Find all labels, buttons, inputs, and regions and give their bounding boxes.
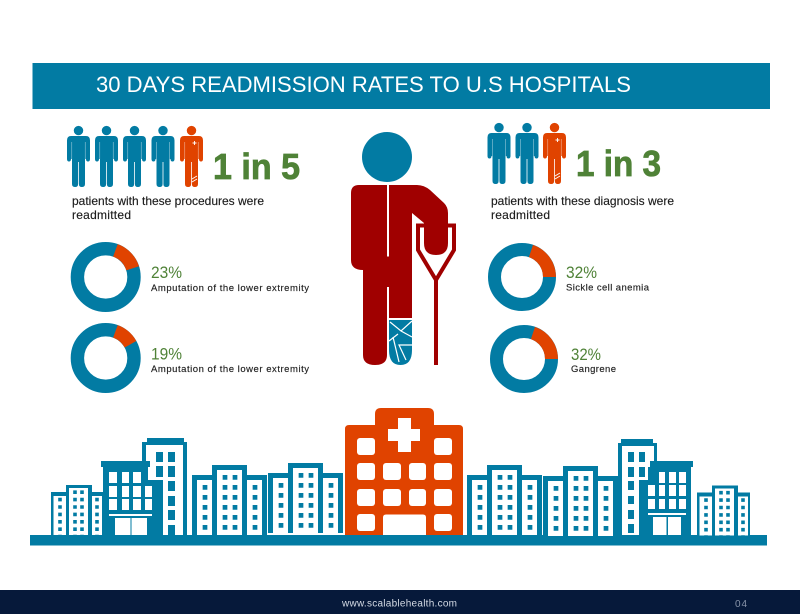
page number: 04 (735, 599, 747, 610)
description: diagnosis: patients with these diagnosis were (491, 194, 674, 208)
label: 19%: 19% (151, 346, 182, 364)
footer url: www.scalablehealth.com (341, 598, 457, 610)
statistic: 1 in 3: 1 in 3 (576, 143, 661, 184)
hospital (345, 408, 463, 535)
cityscape (30, 408, 767, 546)
panel: procedures (67, 126, 309, 386)
donut: gangrene (496, 327, 558, 386)
left buildings (51, 438, 343, 535)
label: gangrene (571, 346, 616, 375)
label: 19% (151, 346, 309, 375)
label: 23%: Amputation of the lower extremity (151, 283, 309, 294)
icon row: 1 in 3 people (488, 123, 566, 184)
label: 19%: Amputation of the lower extremity (151, 364, 309, 375)
description: diagnosis: readmitted (491, 208, 550, 222)
icon row: 1 in 5 people (67, 126, 203, 187)
donut: 23% (77, 244, 139, 305)
footer (0, 590, 800, 614)
description: procedures: patients with these procedures were (72, 194, 264, 208)
title banner (32, 63, 770, 109)
title: 30 DAYS READMISSION RATES TO U.S HOSPITALS (96, 72, 631, 97)
donut: 19% (77, 325, 136, 386)
label: 23%: 23% (151, 264, 182, 282)
right buildings (467, 439, 750, 536)
donut: sickle cell anemia (494, 245, 556, 304)
label: gangrene: 32% (571, 346, 601, 364)
statistic: 1 in 5: 1 in 5 (213, 146, 300, 187)
label: gangrene: Gangrene (571, 364, 616, 375)
label: sickle cell anemia: Sickle cell anemia (566, 282, 650, 294)
label: sickle cell anemia (566, 264, 650, 294)
icon: injured patient with crutch (351, 132, 454, 365)
label: sickle cell anemia: 32% (566, 264, 597, 282)
panel: diagnosis (488, 123, 674, 387)
description: procedures: readmitted (72, 208, 131, 222)
label: 23% (151, 264, 309, 294)
ground (30, 535, 767, 546)
